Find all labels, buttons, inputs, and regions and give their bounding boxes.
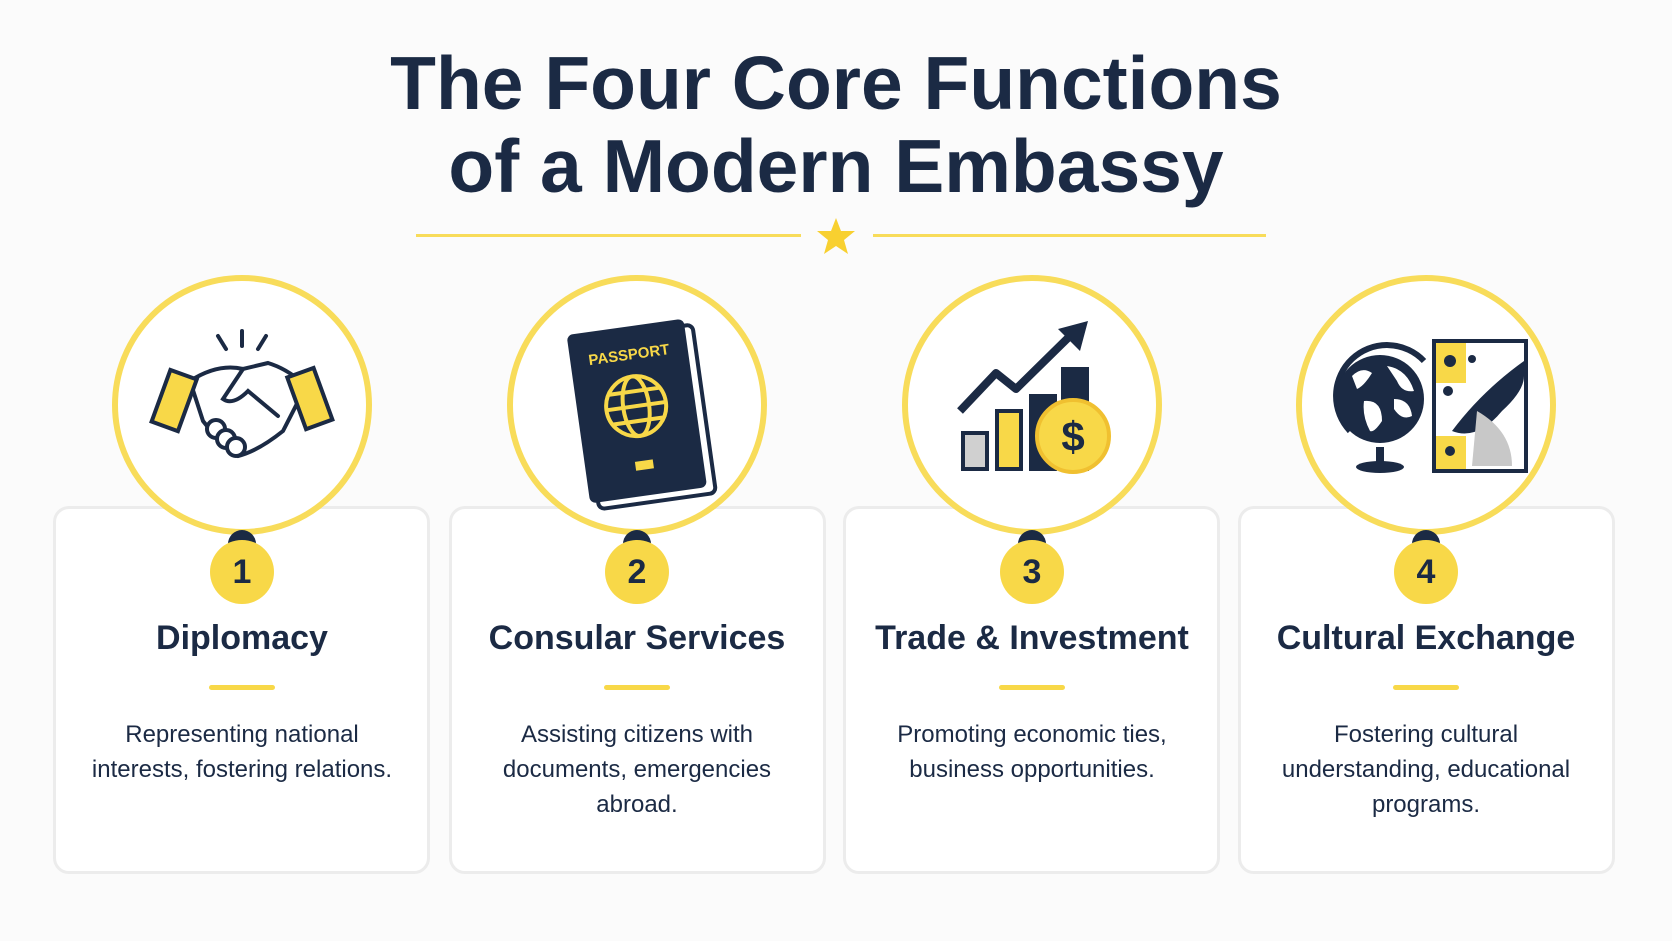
icon circle 2: passport bbox=[507, 275, 767, 535]
badge 4 bbox=[1394, 540, 1458, 604]
description 3: Promoting economic ties, business opportunities. bbox=[897, 721, 1167, 783]
icon circle 4: globe and art bbox=[1296, 275, 1556, 535]
heading 2: Consular Services bbox=[489, 619, 785, 657]
description 2: Assisting citizens with documents, emergencies abroad. bbox=[503, 721, 771, 818]
title: of a Modern Embassy bbox=[448, 124, 1224, 208]
divider with star bbox=[416, 218, 1266, 254]
icon circle 1: handshake bbox=[112, 275, 372, 535]
description 1: Representing national interests, fostering relations. bbox=[92, 721, 392, 783]
card 3 bbox=[843, 506, 1220, 874]
card 4 bbox=[1238, 506, 1615, 874]
heading 1: Diplomacy bbox=[156, 619, 328, 657]
card 1 bbox=[53, 506, 430, 874]
title bbox=[390, 41, 1282, 208]
connector nubs bbox=[228, 530, 256, 544]
badge 1: 1 bbox=[233, 553, 251, 591]
card 2 bbox=[449, 506, 826, 874]
badge 4: 4 bbox=[1417, 553, 1435, 591]
icon circle 3: growth chart bbox=[902, 275, 1162, 535]
badge 3 bbox=[1000, 540, 1064, 604]
title: The Four Core Functions bbox=[390, 41, 1282, 125]
heading 3: Trade & Investment bbox=[875, 619, 1189, 657]
heading 4: Cultural Exchange bbox=[1277, 619, 1575, 657]
icon circle 3: growth chart: $ bbox=[1061, 413, 1085, 460]
badge 2 bbox=[605, 540, 669, 604]
icon circle 2: passport: PASSPORT bbox=[587, 341, 670, 369]
badge 1 bbox=[210, 540, 274, 604]
badge 3: 3 bbox=[1023, 553, 1041, 591]
badge 2: 2 bbox=[628, 553, 646, 591]
description 4: Fostering cultural understanding, educational programs. bbox=[1282, 721, 1570, 818]
